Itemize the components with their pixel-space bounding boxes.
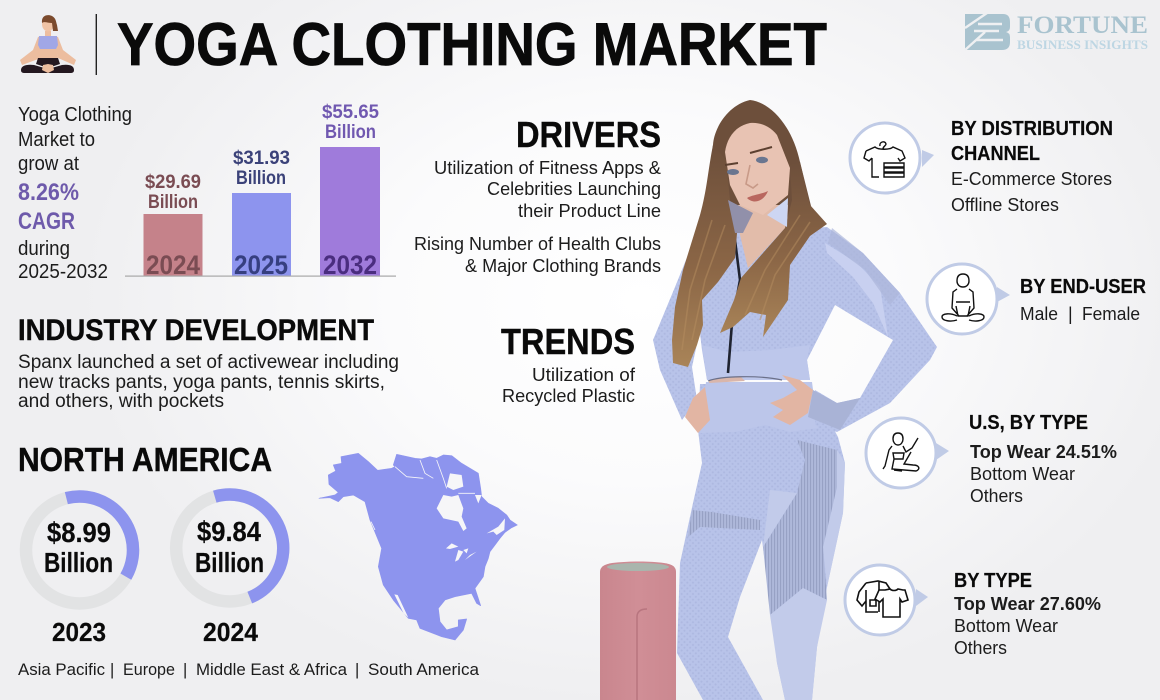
CAGR text block: Yoga Clothing (18, 104, 132, 126)
map: North America (319, 453, 517, 640)
region list: | (355, 661, 359, 679)
bar: 2025 (232, 148, 291, 280)
bar: 2025: 2025 (234, 250, 288, 280)
icon: meditating woman (20, 15, 76, 73)
hem line (708, 377, 782, 381)
CAGR text block: during (18, 238, 70, 260)
bar: 2024: $29.69 (145, 172, 201, 193)
model in yoga clothing (653, 100, 937, 700)
donut: 2024: Billion (195, 547, 264, 578)
logo: Fortune Business Insights: BUSINESS INSIGHTS (1017, 37, 1148, 52)
legging inner panel (763, 490, 797, 547)
panel: U.S. by type: Top Wear 24.51% (970, 442, 1117, 462)
region list: Middle East & Africa (196, 661, 348, 679)
panel: by type: Top Wear 27.60% (954, 594, 1101, 614)
jacket hem (702, 345, 810, 380)
panel: by end-user: Male (1020, 304, 1058, 324)
sleeve light panel (825, 243, 888, 337)
title: YOGA CLOTHING MARKET (117, 11, 827, 78)
trends: TRENDS (501, 321, 635, 362)
CAGR text block (18, 104, 132, 283)
legging outer light strip (823, 450, 845, 587)
hand right (770, 375, 813, 425)
CAGR text block: Market to (18, 129, 95, 151)
drivers: & Major Clothing Brands (465, 256, 661, 276)
trends (501, 321, 636, 406)
CAGR text block: grow at (18, 153, 79, 175)
yoga mat (600, 562, 676, 700)
region list: Asia Pacific (18, 661, 105, 679)
drivers: Rising Number of Health Clubs (414, 234, 661, 254)
panel: U.S. by type: Bottom Wear (970, 464, 1075, 484)
legging lower panel (770, 588, 827, 700)
hand left (685, 387, 710, 433)
chest skin (738, 205, 788, 268)
nose (746, 165, 758, 188)
drivers: their Product Line (518, 201, 661, 221)
drivers: Utilization of Fitness Apps & (434, 158, 661, 178)
sleeve left (653, 250, 710, 420)
panel: by distribution channel (850, 118, 1113, 215)
bar: 2024: 2024 (146, 250, 200, 280)
trends: Utilization of (532, 365, 636, 385)
zipper (728, 240, 740, 373)
icon: seated figure (927, 264, 1010, 334)
hair lock right (720, 162, 827, 337)
face (725, 123, 790, 215)
panel: by type: Bottom Wear (954, 616, 1058, 636)
CAGR text block: 8.26% (18, 179, 79, 206)
bar chart: market size (125, 102, 396, 280)
donut: 2023 (15, 485, 144, 647)
donut: 2024: 2024 (203, 617, 259, 647)
panel: by end-user: BY END-USER (1020, 276, 1147, 298)
eyes (725, 147, 772, 175)
sleeve right (815, 227, 937, 432)
leggings (677, 384, 845, 700)
panel: U.S. by type: Others (970, 486, 1023, 506)
hair lock left (672, 145, 737, 367)
panel: by end-user (927, 264, 1147, 334)
hair cap (707, 100, 812, 225)
bar: 2032: $55.65 (322, 102, 379, 123)
bar: 2032: Billion (325, 122, 376, 143)
bar: 2032 (320, 102, 380, 280)
panel: by distribution channel: Offline Stores (951, 195, 1059, 215)
drivers (414, 114, 661, 276)
hair strands (682, 215, 810, 350)
trends: Recycled Plastic (502, 386, 635, 406)
drivers: DRIVERS (516, 114, 661, 155)
industry development: Spanx launched a set of activewear including (18, 352, 399, 373)
drivers: Celebrities Launching (487, 179, 661, 199)
logo: Fortune Business Insights: FORTUNE (1017, 12, 1148, 39)
industry development: new tracks pants, yoga pants, tennis skirts, (18, 372, 385, 393)
heading: North America: NORTH AMERICA (18, 441, 272, 478)
industry development: INDUSTRY DEVELOPMENT (18, 314, 374, 347)
jacket torso (696, 222, 835, 380)
icon: stretching figure (866, 418, 949, 488)
collar light (767, 198, 788, 227)
panel: by type: BY TYPE (954, 570, 1032, 592)
region list: | (110, 661, 114, 679)
panel: by type (845, 565, 1101, 658)
cuff (808, 390, 860, 430)
panel: by distribution channel: CHANNEL (951, 143, 1040, 165)
panel: by type: Others (954, 638, 1007, 658)
icon: jacket and t-shirt (845, 565, 928, 635)
industry development: and others, with pockets (18, 391, 224, 412)
donut: 2024 (164, 482, 296, 647)
panel: by end-user: Female (1082, 304, 1140, 324)
region list: South America (368, 661, 480, 679)
CAGR text block: 2025-2032 (18, 261, 108, 283)
mouth (747, 191, 768, 202)
region list (18, 661, 480, 679)
panel: by end-user: | (1068, 304, 1073, 324)
sleeve dark panel (828, 228, 900, 305)
CAGR text block: CAGR (18, 208, 75, 235)
region list: | (183, 661, 187, 679)
panel: U.S. by type (866, 412, 1117, 506)
legging rib band (688, 510, 760, 537)
panel: by distribution channel: BY DISTRIBUTION (951, 118, 1113, 140)
bar: 2025: Billion (236, 168, 286, 189)
donut: 2023: 2023 (52, 617, 106, 647)
donut: 2023: Billion (44, 547, 113, 578)
panel: by distribution channel: E-Commerce Stores (951, 169, 1112, 189)
collar dark (728, 200, 753, 233)
donut: 2023: $8.99 (47, 517, 111, 548)
header divider (96, 14, 97, 75)
bar: 2024: Billion (148, 192, 198, 213)
bar: 2025: $31.93 (233, 148, 290, 169)
legging rib panel: hip (763, 440, 837, 615)
legging waistband (700, 382, 818, 433)
bar: 2024 (144, 172, 202, 280)
logo: Fortune Business Insights (965, 12, 1148, 52)
panel: U.S. by type: U.S, BY TYPE (969, 412, 1088, 434)
region list: Europe (123, 661, 175, 679)
midriff (709, 376, 745, 383)
donut: 2024: $9.84 (197, 516, 261, 547)
bar: 2032: 2032 (323, 250, 377, 280)
industry development (18, 314, 399, 412)
icon: clothes stack (850, 123, 934, 193)
